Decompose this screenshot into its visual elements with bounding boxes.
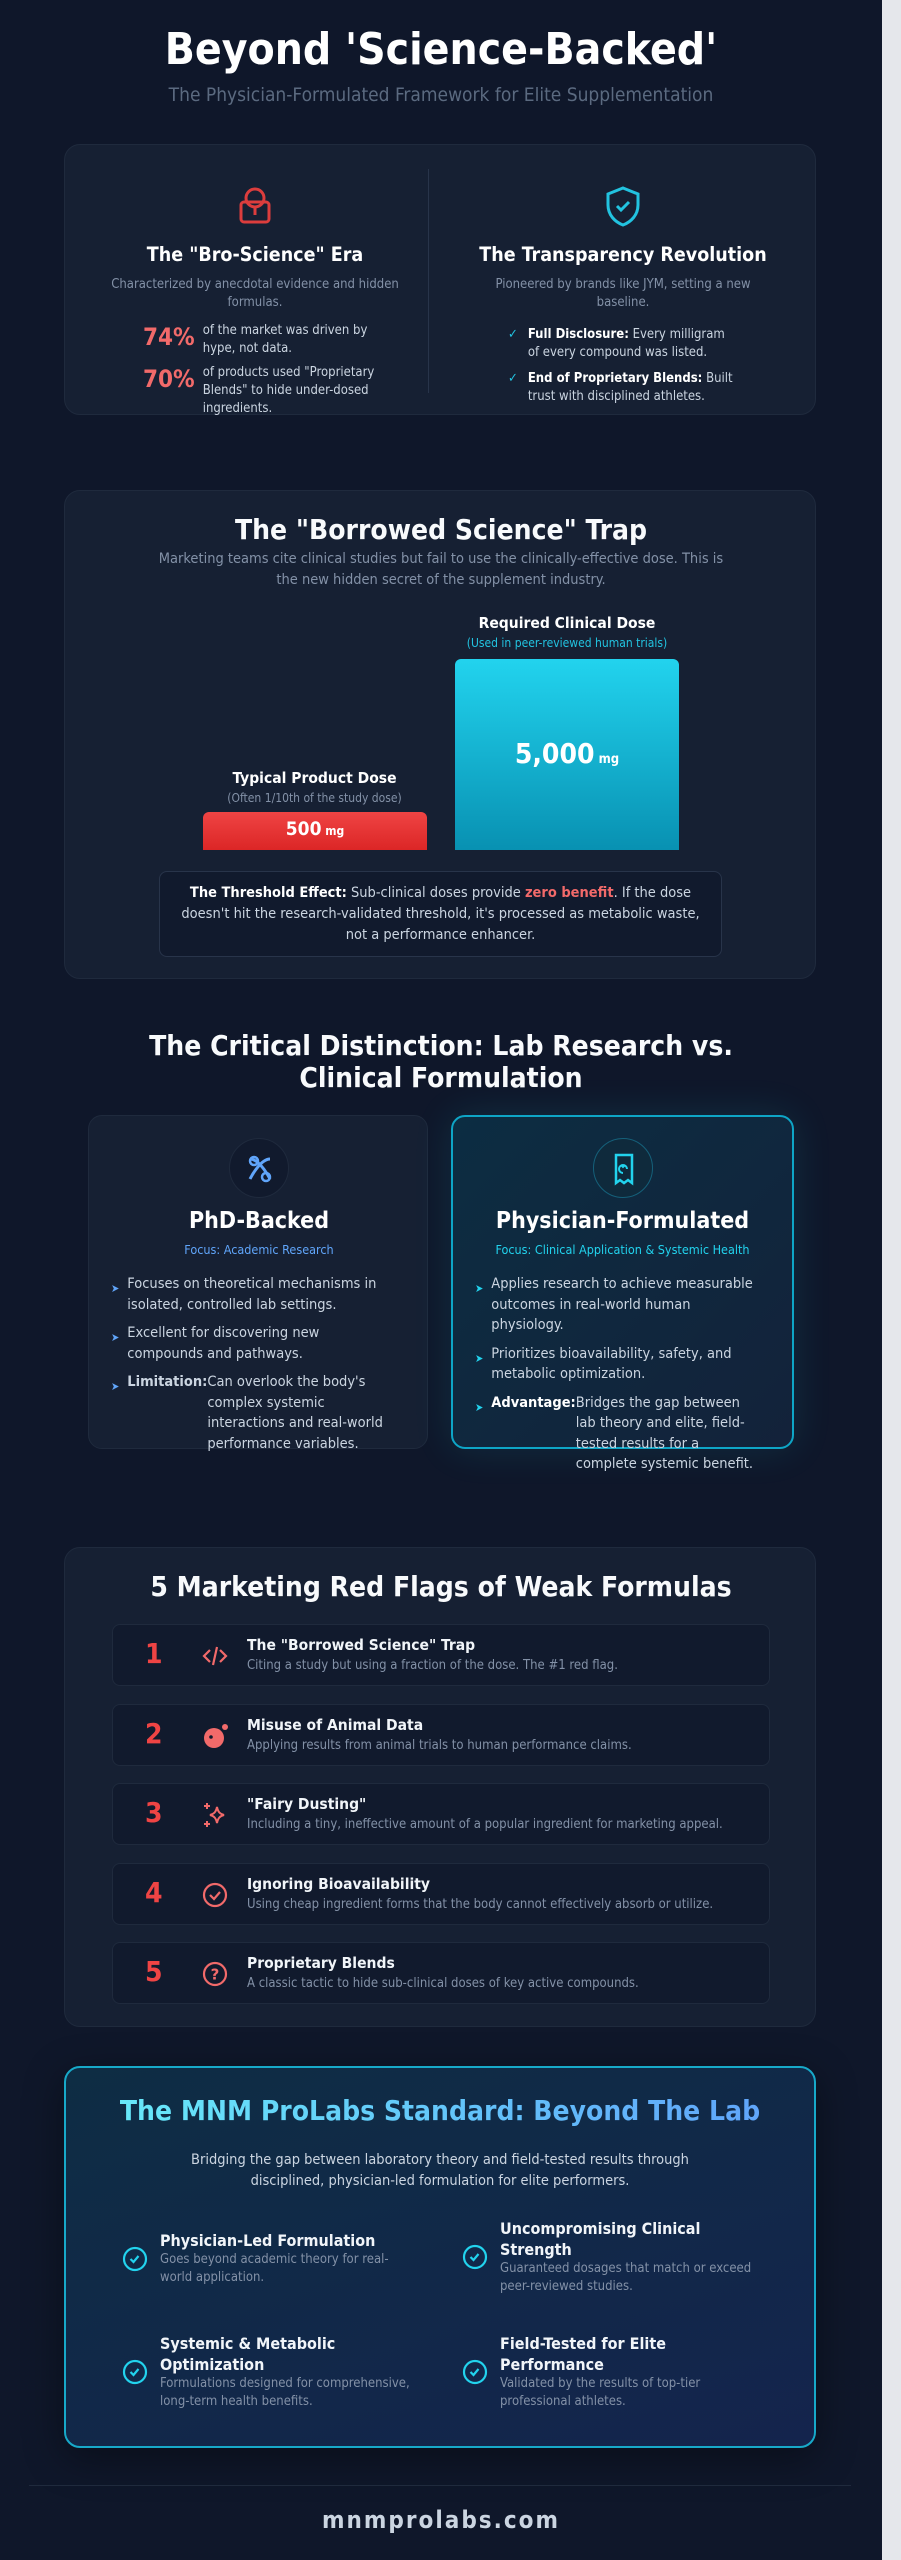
bar label: typical	[227, 769, 402, 805]
bar label: required: (Used in peer-reviewed human trials)	[467, 636, 667, 650]
heading: The MNM ProLabs Standard: Beyond The Lab	[120, 2094, 760, 2127]
feature: clinical strength: Uncompromising Clinical Strength	[500, 2219, 700, 2259]
bullet list	[111, 1276, 383, 1452]
bullet list: ➤	[475, 1400, 483, 1414]
icon: question: ?	[211, 1966, 219, 1984]
panel: borrowed science trap	[64, 490, 816, 979]
panel: physician-formulated	[451, 1115, 794, 1449]
icon: dna	[229, 1138, 289, 1198]
icon: lock	[240, 188, 270, 224]
flag 5: Proprietary Blends	[247, 1954, 395, 1972]
flag 1: The "Borrowed Science" Trap	[247, 1636, 475, 1654]
bullet list	[475, 1276, 753, 1472]
feature: physician-led: Goes beyond academic theory for real-world application.	[160, 2252, 389, 2285]
stats: 74%	[143, 323, 195, 351]
column: bro-science	[111, 188, 399, 416]
callout: threshold effect: The Threshold Effect: Sub-clinical doses provide zero benefit. If the dose doesn't hit the research-validated threshold, it's processed as metabolic waste, not a performance enhancer.	[181, 885, 700, 943]
bar: 500mg	[203, 812, 427, 850]
stats: of products used "Proprietary Blends" to hide under-dosed ingredients.	[203, 365, 374, 416]
heading: The "Borrowed Science" Trap	[235, 513, 647, 546]
panel: red flags	[64, 1547, 816, 2027]
bullet list: Applies research to achieve measurable outcomes in real-world human physiology.	[491, 1276, 753, 1333]
panel: PhD-backed	[88, 1115, 428, 1449]
flag 1: 1	[145, 1637, 163, 1670]
icon: document	[593, 1138, 653, 1198]
bullet list: Excellent for discovering new compounds and pathways.	[127, 1325, 319, 1362]
flag 2: Applying results from animal trials to human performance claims.	[247, 1738, 632, 1753]
bullet list: Advantage:	[491, 1394, 576, 1410]
bullet list: ➤	[475, 1282, 483, 1295]
subtitle: The Physician-Formulated Framework for Elite Supplementation	[169, 84, 713, 106]
column: transparency	[479, 186, 767, 404]
heading: 5 Marketing Red Flags of Weak Formulas	[150, 1570, 732, 1603]
flag 5: A classic tactic to hide sub-clinical doses of key active compounds.	[247, 1976, 639, 1991]
title: Beyond 'Science-Backed'	[165, 24, 717, 75]
stats: of the market was driven by hype, not data.	[203, 323, 367, 356]
feature: field-tested: Field-Tested for Elite Performance	[500, 2334, 666, 2374]
bullet list: Prioritizes bioavailability, safety, and metabolic optimization.	[491, 1346, 732, 1382]
flag 4: Using cheap ingredient forms that the body cannot effectively absorb or utilize.	[247, 1897, 713, 1912]
checklist: End of Proprietary Blends: Built trust with disciplined athletes.	[528, 371, 733, 404]
panel: MNM ProLabs standard	[64, 2066, 816, 2448]
callout: threshold effect	[159, 871, 722, 957]
flag 3: "Fairy Dusting"	[247, 1795, 366, 1813]
bar label: typical: (Often 1/10th of the study dose)	[227, 791, 402, 805]
feature: systemic	[122, 2334, 410, 2409]
bar: 5000mg: 5,000 mg	[515, 737, 619, 770]
heading: The Transparency Revolution	[479, 243, 767, 266]
heading: critical distinction: The Critical Distinction: Lab Research vs.	[149, 1029, 733, 1062]
checklist: Full Disclosure: Every milligram of every compound was listed.	[528, 327, 725, 360]
bullet list: Limitation:	[127, 1374, 207, 1390]
flag 5	[112, 1942, 770, 2004]
flag 2	[112, 1704, 770, 1766]
feature: systemic: Formulations designed for comprehensive, long-term health benefits.	[160, 2376, 410, 2409]
footer: website: mnmprolabs.com	[322, 2506, 560, 2534]
bar chart	[203, 614, 679, 850]
bullet list: ➤	[475, 1352, 483, 1364]
flag 3: 3	[145, 1796, 163, 1829]
bar: 5000mg	[455, 659, 679, 850]
bullet list: Bridges the gap between lab theory and elite, field-tested results for a complete systemic benefit.	[576, 1394, 753, 1472]
flag 2: Misuse of Animal Data	[247, 1716, 423, 1734]
heading: critical distinction: Clinical Formulation	[299, 1061, 583, 1094]
focus label: Focus: Clinical Application & Systemic Health	[495, 1242, 750, 1257]
icon: check circle	[202, 1882, 228, 1908]
bullet list: ➤	[111, 1331, 119, 1344]
feature: clinical strength: Guaranteed dosages that match or exceed peer-reviewed studies.	[500, 2261, 751, 2294]
description: Bridging the gap between laboratory theory and field-tested results through disciplined, physician-led formulation for elite performers.	[191, 2152, 689, 2189]
heading: Physician-Formulated	[496, 1208, 749, 1234]
icon: sparkles	[204, 1803, 224, 1827]
bar: 500mg: 500 mg	[286, 818, 344, 840]
focus label: Focus: Academic Research	[184, 1242, 334, 1257]
icon: animal	[204, 1724, 228, 1748]
bar label: required	[467, 614, 667, 650]
checklist: ✓	[508, 371, 518, 386]
icon: shield	[606, 186, 640, 227]
flag 4: Ignoring Bioavailability	[247, 1875, 430, 1893]
description: Characterized by anecdotal evidence and hidden formulas.	[111, 277, 399, 310]
flag 5: 5	[145, 1955, 163, 1988]
flag 4: 4	[145, 1876, 163, 1909]
flag 1: Citing a study but using a fraction of the dose. The #1 red flag.	[247, 1658, 618, 1673]
feature: systemic: Systemic & Metabolic Optimization	[160, 2334, 335, 2374]
heading: critical distinction	[149, 1029, 733, 1094]
feature: field-tested	[462, 2334, 700, 2409]
flag 4	[112, 1863, 770, 1925]
checklist	[508, 327, 733, 404]
feature: clinical strength	[462, 2219, 751, 2294]
bar label: required: Required Clinical Dose	[479, 614, 655, 632]
description: Marketing teams cite clinical studies but fail to use the clinically-effective dose. This is the new hidden secret of the supplement industry.	[159, 551, 723, 588]
flag 1	[112, 1624, 770, 1686]
bullet list: Focuses on theoretical mechanisms in isolated, controlled lab settings.	[127, 1276, 376, 1312]
checklist: ✓	[508, 327, 518, 342]
flag 3: Including a tiny, ineffective amount of a popular ingredient for marketing appeal.	[247, 1817, 723, 1832]
flag 3	[112, 1783, 770, 1845]
icon: question	[202, 1962, 228, 1986]
feature: physician-led: Physician-Led Formulation	[160, 2231, 375, 2250]
bar label: typical: Typical Product Dose	[232, 769, 397, 787]
bullet list: ➤	[111, 1380, 119, 1393]
bullet list: Can overlook the body's complex systemic interactions and real-world performance variables.	[207, 1374, 383, 1452]
heading: PhD-Backed	[189, 1208, 329, 1234]
description: Pioneered by brands like JYM, setting a new baseline.	[495, 277, 751, 310]
heading: The "Bro-Science" Era	[147, 243, 363, 266]
stats: 70%	[143, 365, 195, 393]
icon: code	[202, 1646, 228, 1666]
stats	[143, 323, 374, 416]
feature: field-tested: Validated by the results of top-tier professional athletes.	[500, 2376, 700, 2409]
panel: eras	[64, 144, 816, 415]
bullet list: ➤	[111, 1282, 119, 1295]
flag 2: 2	[145, 1717, 163, 1750]
feature: physician-led	[122, 2231, 389, 2285]
